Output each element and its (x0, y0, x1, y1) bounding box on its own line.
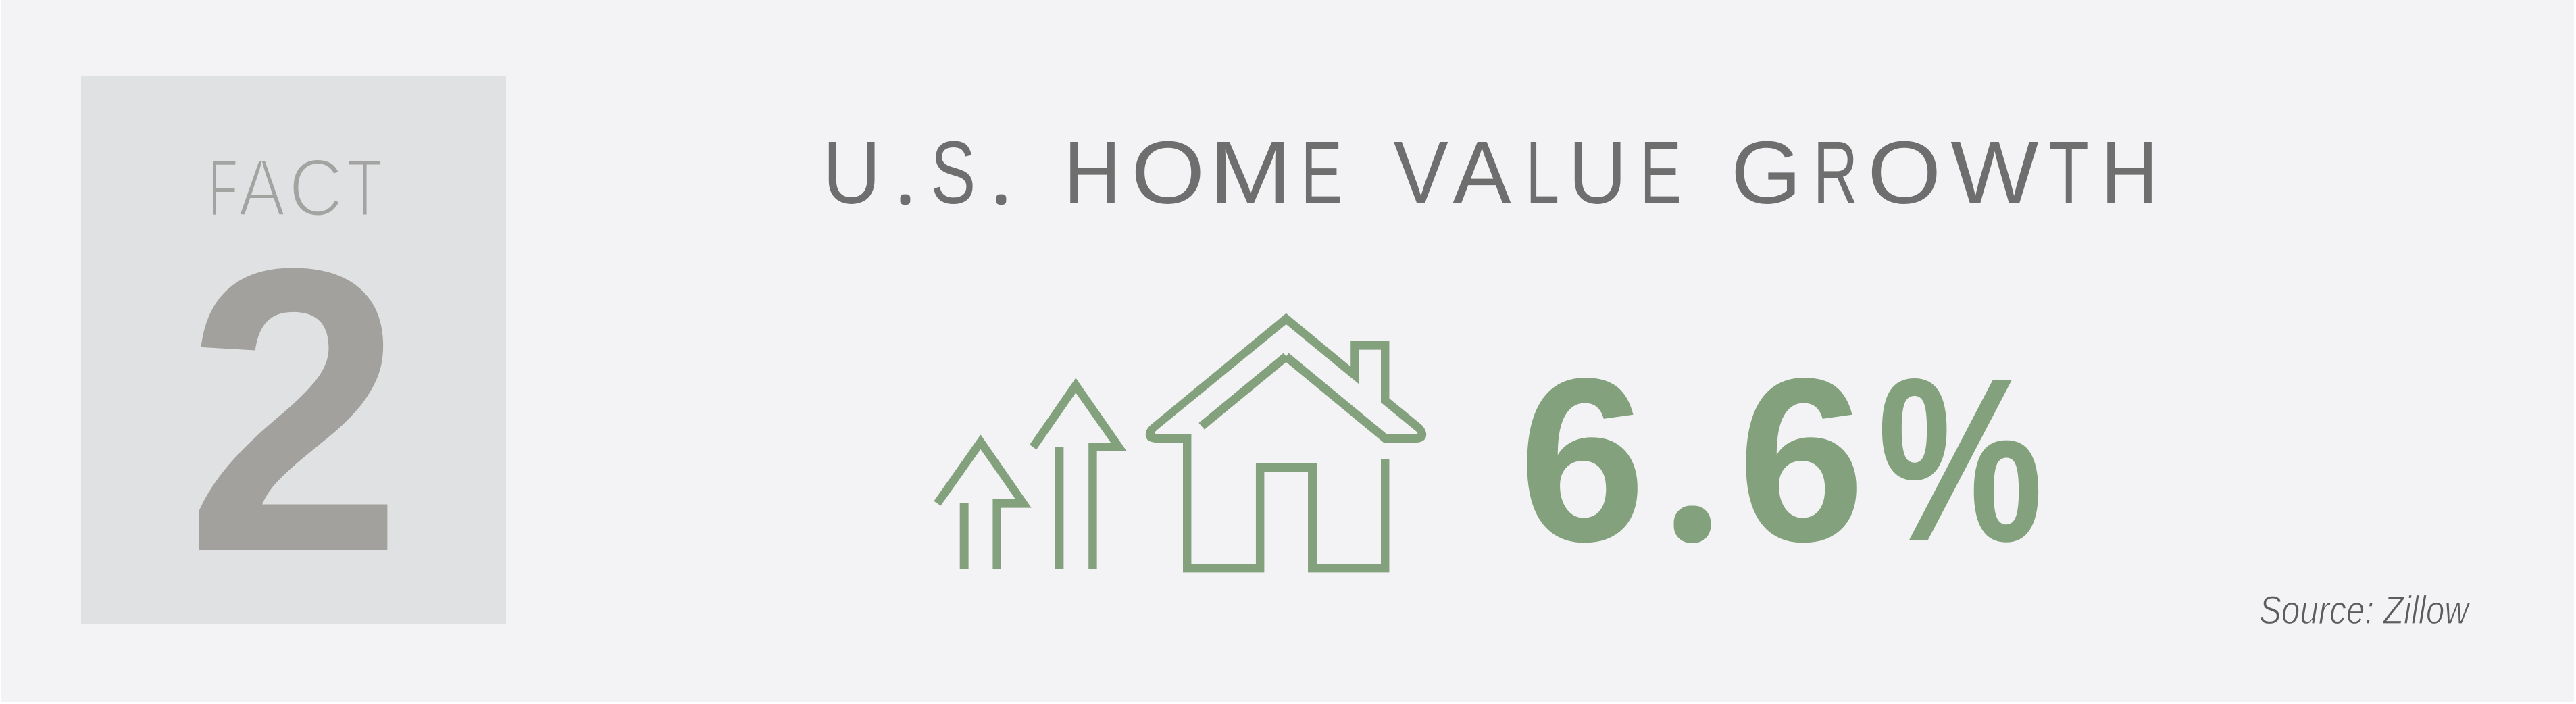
icon: rising arrows and house (934, 313, 1426, 572)
title (823, 122, 2158, 223)
title: R (1813, 123, 1858, 223)
title: E (1300, 124, 1342, 223)
icon: tall arrow (1030, 378, 1127, 569)
label: FACT: F (208, 143, 238, 234)
title: M (1209, 122, 1292, 222)
statistic: 6.6%: 6 (1519, 330, 1646, 590)
title: O (1867, 123, 1941, 222)
title: . (996, 171, 1006, 209)
label: FACT (208, 142, 383, 234)
label: FACT: T (347, 143, 383, 234)
label: FACT: A (238, 142, 285, 233)
title: E (1640, 124, 1682, 223)
icon: small arrow (934, 434, 1032, 569)
title: U (1569, 122, 1627, 222)
statistic: 6.6% (1519, 330, 2043, 590)
statistic: 6.6%: % (1877, 330, 2043, 590)
title: L (1525, 122, 1559, 222)
title: O (1131, 123, 1205, 222)
source note: Source: Zillow (2259, 588, 2471, 632)
title: V (1393, 122, 1448, 222)
title: . (901, 171, 910, 209)
fact numeral 2: 2 (185, 184, 403, 636)
statistic: 6.6%: 6 (1738, 330, 1865, 590)
label: FACT: C (288, 143, 343, 233)
title: T (2049, 122, 2089, 222)
title: S (931, 122, 976, 222)
panel: fact number (81, 76, 506, 624)
title: U (823, 122, 881, 222)
title: A (1453, 123, 1511, 222)
statistic: 6.6%: . (1688, 503, 1696, 532)
title: H (2101, 123, 2158, 222)
title: G (1731, 123, 1802, 222)
icon: house (1146, 313, 1426, 572)
title: H (1064, 123, 1121, 222)
title: W (1950, 123, 2039, 222)
